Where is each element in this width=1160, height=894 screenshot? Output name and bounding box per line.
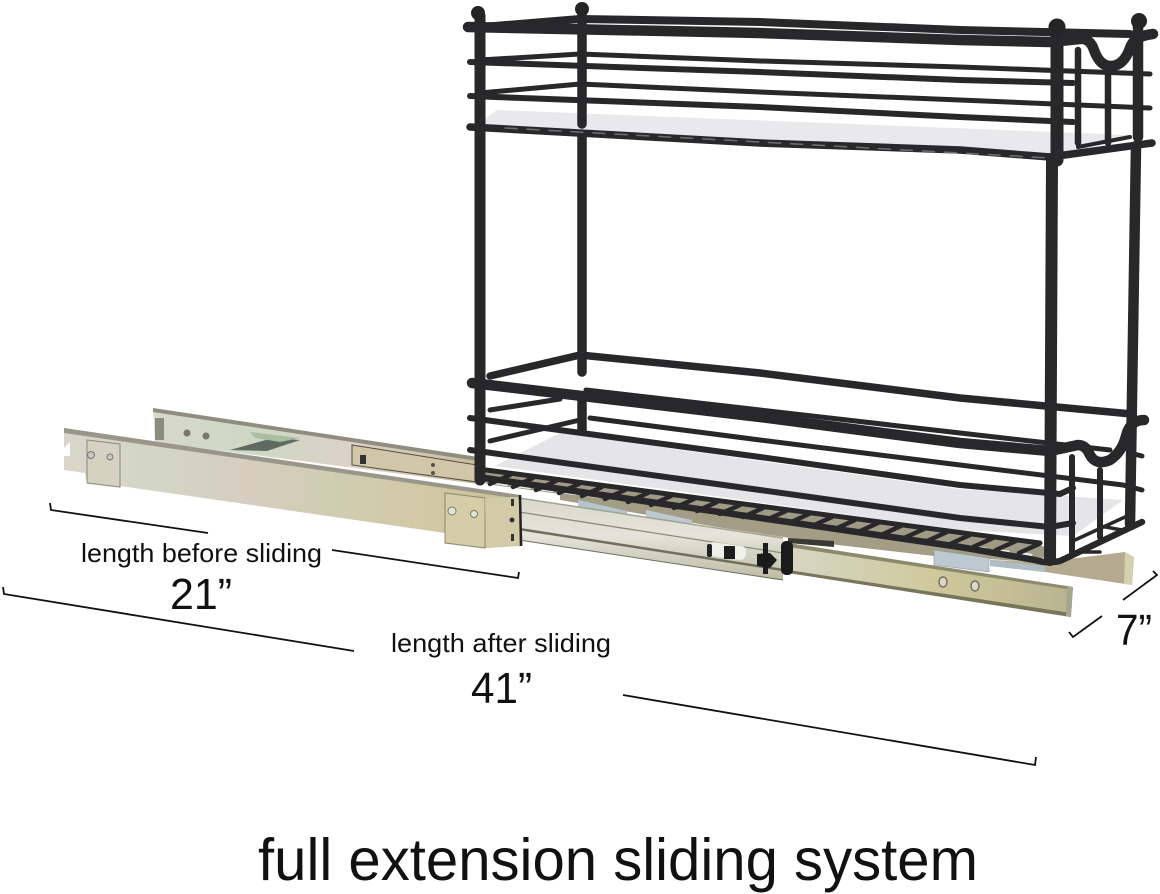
back slide rail xyxy=(153,408,478,484)
dimension line after sliding xyxy=(3,587,1036,765)
label: length before sliding: length before sliding xyxy=(81,538,322,568)
dimension: length before sliding xyxy=(50,503,519,619)
top shelf front ledge xyxy=(470,127,1152,157)
value: 7 inches: 7” xyxy=(1116,606,1152,655)
back posts xyxy=(582,10,1138,524)
ball finials xyxy=(471,2,1147,36)
front slide rail with brackets xyxy=(64,428,523,548)
dimension line before sliding xyxy=(50,503,519,578)
front wires, bottom shelf xyxy=(470,418,1073,527)
value: 21 inches: 21” xyxy=(170,570,232,619)
back and side wires, top shelf xyxy=(480,54,1150,108)
icon: black catch xyxy=(757,541,793,575)
front posts xyxy=(480,16,1057,560)
front wires, top shelf xyxy=(470,62,1073,122)
title: full extension sliding system xyxy=(258,827,978,893)
bottom grid xyxy=(490,478,1040,552)
extended far rail xyxy=(788,543,1073,617)
front bottom rail with handle xyxy=(472,383,1144,462)
bottom shelf board xyxy=(495,433,1123,536)
dimension line width xyxy=(1069,571,1157,637)
dimension: width xyxy=(1069,571,1157,655)
label: length after sliding: length after sliding xyxy=(391,628,611,658)
middle slide rail with latch xyxy=(519,498,793,580)
top shelf board xyxy=(483,110,1130,155)
bottom grid right side ties xyxy=(1072,517,1125,552)
back and side wires, bottom shelf xyxy=(490,390,1142,490)
wire rack xyxy=(468,10,1153,562)
far slide rail extension and tabs xyxy=(560,492,1134,585)
value: 41 inches: 41” xyxy=(471,664,532,713)
icon: latch slot xyxy=(707,541,747,561)
front top rail with handle xyxy=(468,27,1153,66)
top shelf right-side wires xyxy=(1078,50,1108,143)
dimension: length after sliding xyxy=(3,587,1036,765)
